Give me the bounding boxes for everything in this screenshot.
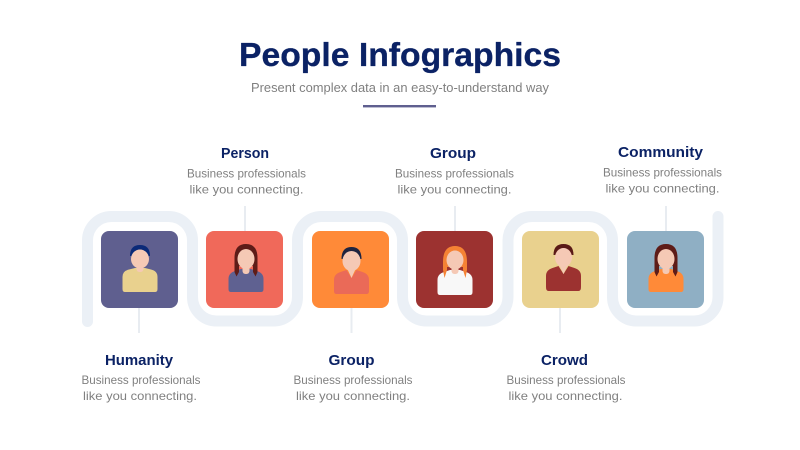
label: Humanity — [82, 352, 200, 403]
label: Crowd: Business professionals — [506, 373, 626, 387]
label: Group (lower): like you connecting. — [296, 389, 410, 403]
label: Group (lower): Business professionals — [294, 373, 412, 387]
label: Person — [187, 145, 306, 196]
subtitle: Present complex data in an easy-to-understand way — [251, 81, 550, 95]
label: Group (upper): like you connecting. — [398, 182, 512, 196]
label: Humanity: like you connecting. — [83, 389, 197, 403]
label: Crowd: Crowd — [541, 352, 588, 369]
label: Community: like you connecting. — [606, 182, 720, 196]
label: Group (upper): Group — [430, 145, 476, 162]
connector lines — [139, 206, 666, 333]
card: Group (lower) — [312, 231, 389, 308]
icon: woman in slate top — [228, 244, 264, 292]
label: Community: Community — [618, 144, 704, 161]
card: Crowd — [522, 231, 599, 308]
label: Community — [603, 144, 722, 196]
card: Person — [206, 231, 283, 308]
label: Crowd: like you connecting. — [508, 389, 622, 403]
card: Community — [627, 231, 704, 308]
label: Humanity: Humanity — [105, 352, 174, 369]
card: Humanity — [101, 231, 178, 308]
icon: man in yellow shirt — [122, 245, 158, 292]
icon: red-haired woman in white top — [438, 246, 472, 295]
icon: man in maroon shirt — [546, 244, 581, 291]
label: Group (upper) — [395, 145, 514, 196]
icon: woman in orange top — [648, 244, 684, 292]
label: Group (lower): Group — [328, 352, 374, 369]
title: People Infographics — [239, 36, 561, 73]
label: Community: Business professionals — [603, 166, 722, 180]
title divider — [363, 105, 436, 107]
label: Group (lower) — [294, 352, 412, 403]
label: Crowd — [506, 352, 626, 403]
card: Group (upper) — [416, 231, 493, 308]
serpentine path — [88, 216, 718, 322]
label: Humanity: Business professionals — [82, 373, 200, 387]
label: Person: like you connecting. — [190, 182, 304, 196]
label: Person: Person — [221, 145, 269, 162]
label: Group (upper): Business professionals — [395, 166, 514, 180]
label: Person: Business professionals — [187, 166, 306, 180]
icon: man in coral shirt — [334, 247, 369, 294]
